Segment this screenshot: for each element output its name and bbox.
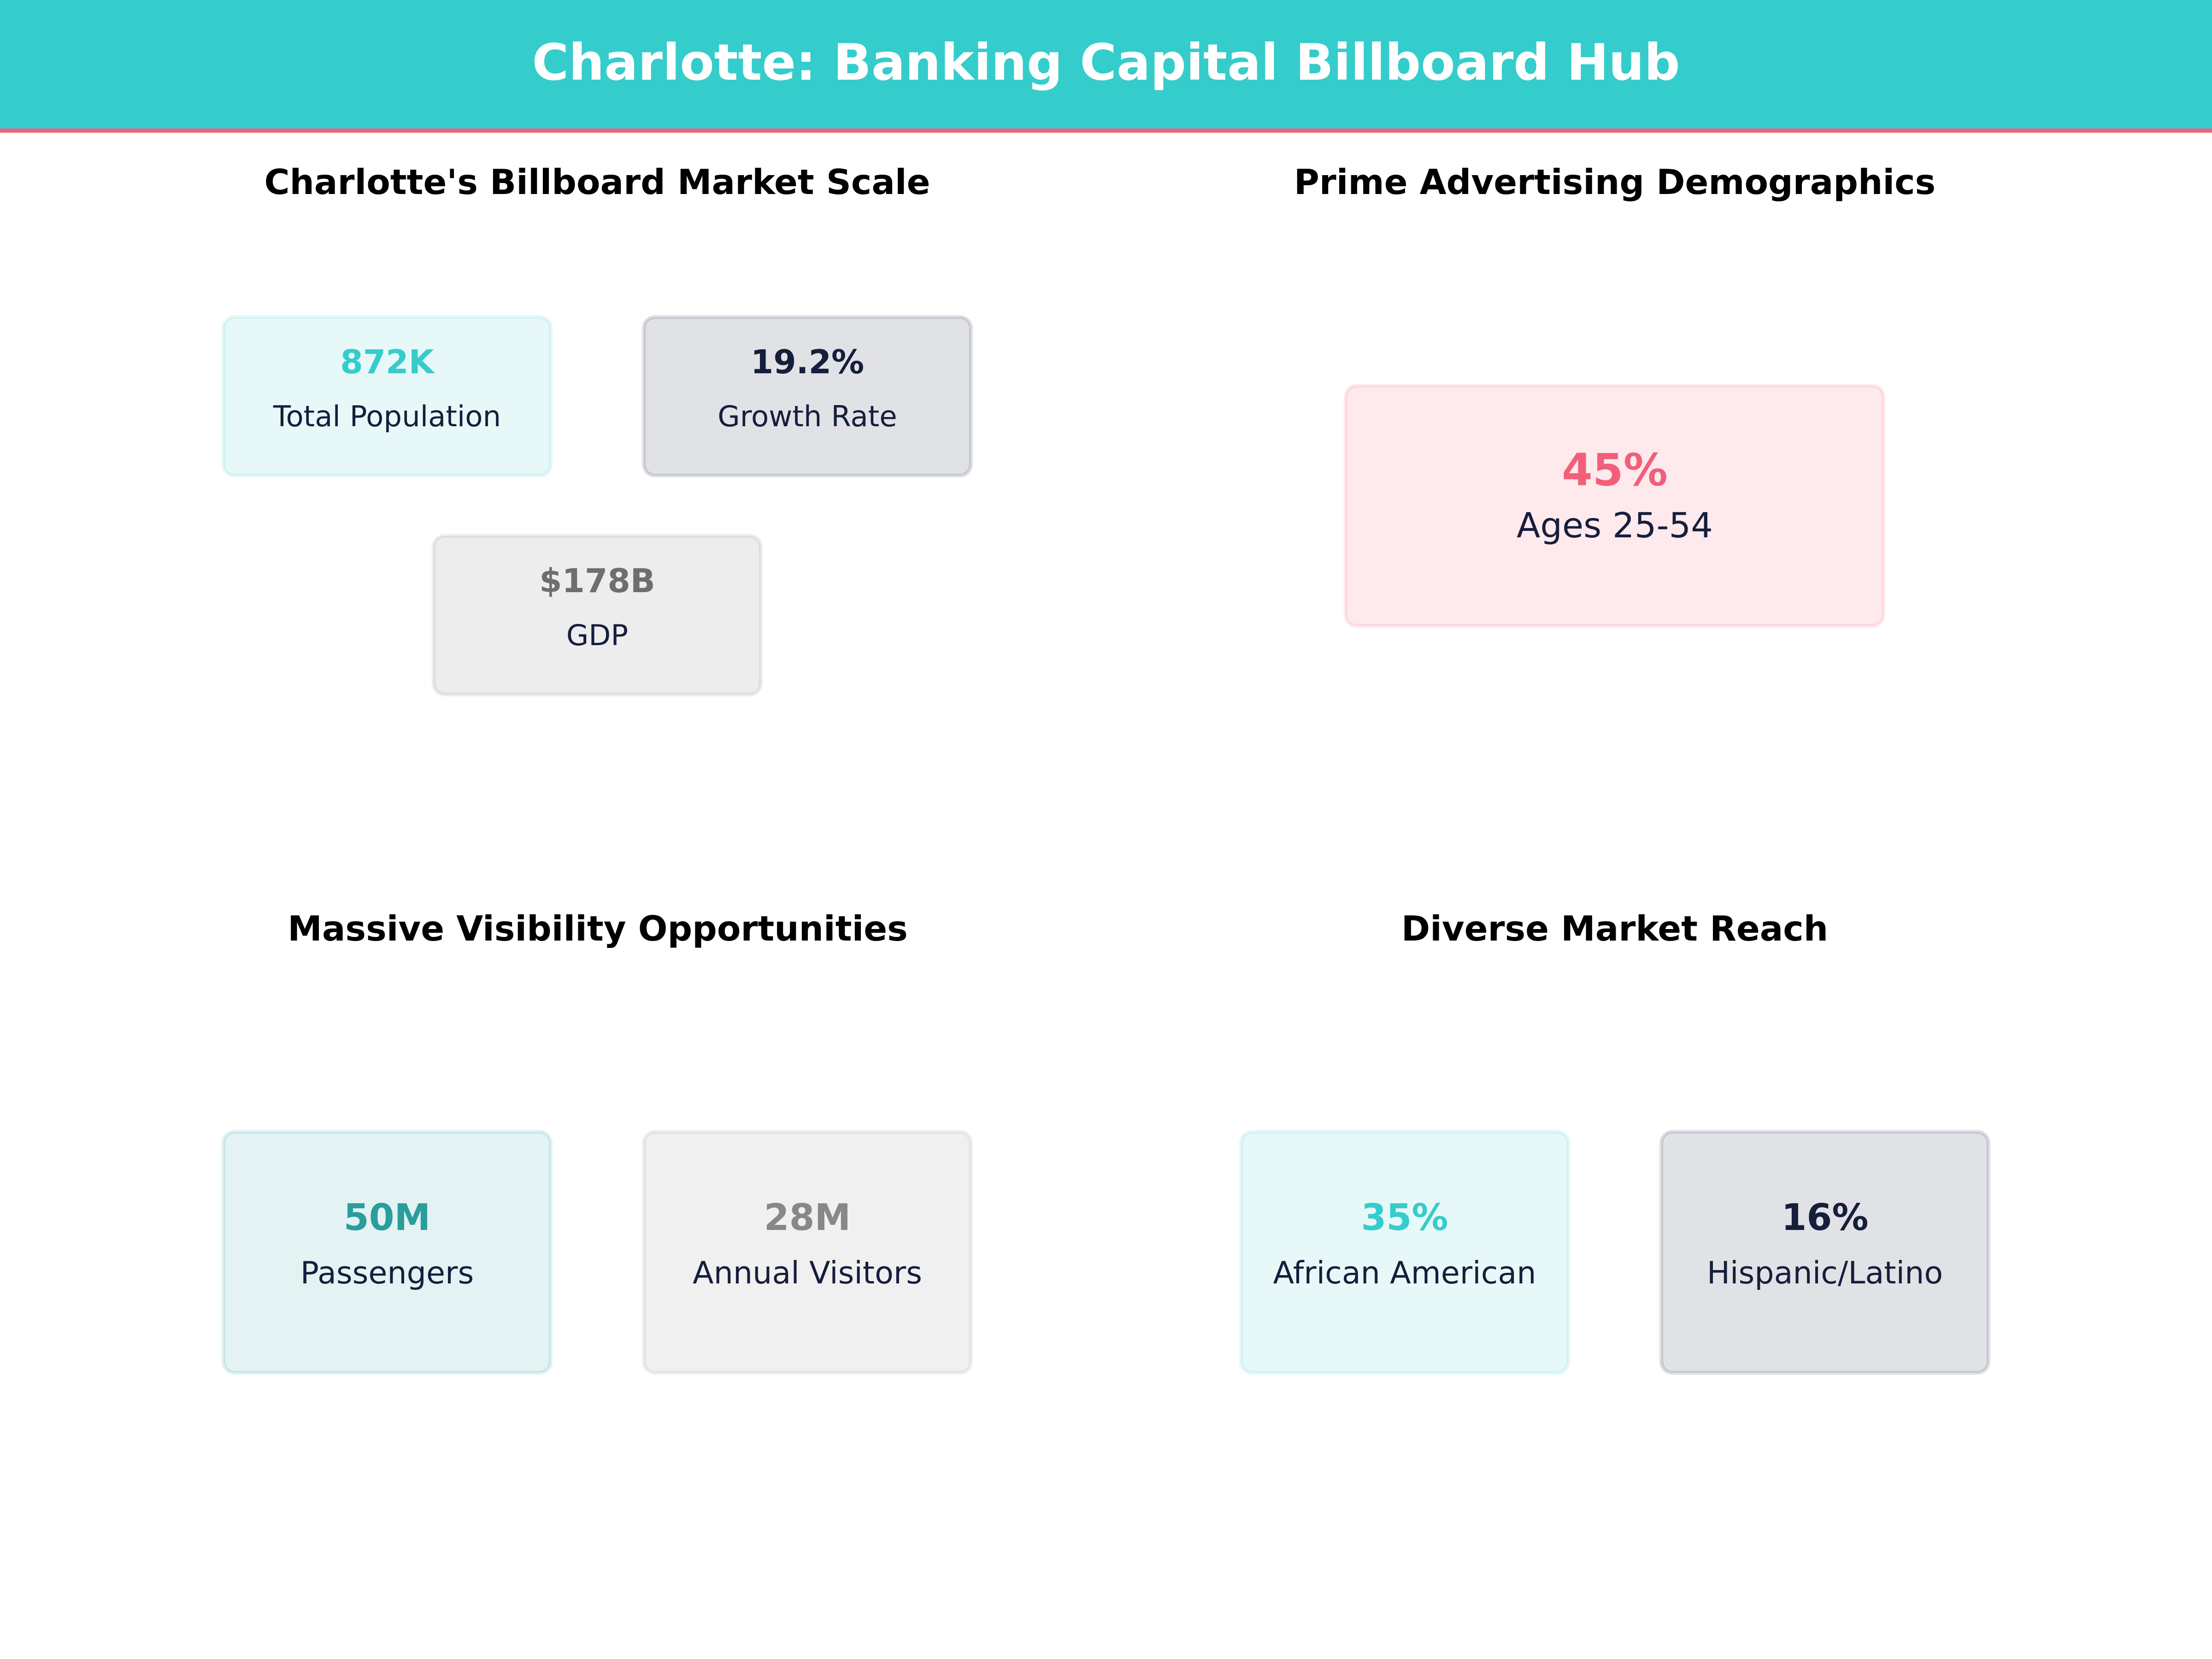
stat card: hispanic/latino (1661, 1132, 1988, 1373)
panel: demographics (1294, 162, 1936, 626)
stat card: passengers: Passengers (300, 1255, 474, 1291)
stat card: annual visitors: 28M (764, 1196, 851, 1239)
panel: visibility (224, 908, 971, 1373)
stat card: GDP: GDP (566, 618, 628, 652)
stat card: ages 25-54 (1346, 386, 1883, 626)
stat card: ages 25-54: 45% (1562, 444, 1668, 496)
heading: market scale: Charlotte's Billboard Market Scale (264, 162, 930, 202)
panel: market scale (224, 162, 971, 694)
stat card: total population: Total Population (273, 400, 501, 433)
stat card: passengers: 50M (344, 1196, 430, 1239)
stat card: growth rate: 19.2% (751, 343, 864, 381)
stat card: annual visitors: Annual Visitors (693, 1255, 922, 1291)
stat card: growth rate: Growth Rate (718, 400, 897, 433)
stat card: growth rate (644, 317, 971, 476)
heading: demographics: Prime Advertising Demographics (1294, 162, 1936, 202)
heading: visibility: Massive Visibility Opportunities (288, 908, 908, 949)
panel: diversity (1241, 908, 1988, 1373)
stat card: african american: 35% (1361, 1196, 1448, 1239)
stat card: total population: 872K (340, 343, 435, 381)
header banner (0, 0, 2212, 133)
heading: diversity: Diverse Market Reach (1401, 908, 1828, 949)
stat card: hispanic/latino: Hispanic/Latino (1707, 1255, 1943, 1291)
stat card: ages 25-54: Ages 25-54 (1517, 505, 1713, 546)
title: Charlotte: Banking Capital Billboard Hub (532, 33, 1680, 92)
stat card: african american: African American (1273, 1255, 1536, 1291)
stat card: passengers (224, 1132, 551, 1373)
stat card: annual visitors (644, 1132, 971, 1373)
stat card: GDP: $178B (539, 562, 655, 600)
stat card: total population (224, 317, 551, 476)
stat card: GDP (434, 536, 761, 694)
stat card: hispanic/latino: 16% (1781, 1196, 1869, 1239)
stat card: african american (1241, 1132, 1568, 1373)
